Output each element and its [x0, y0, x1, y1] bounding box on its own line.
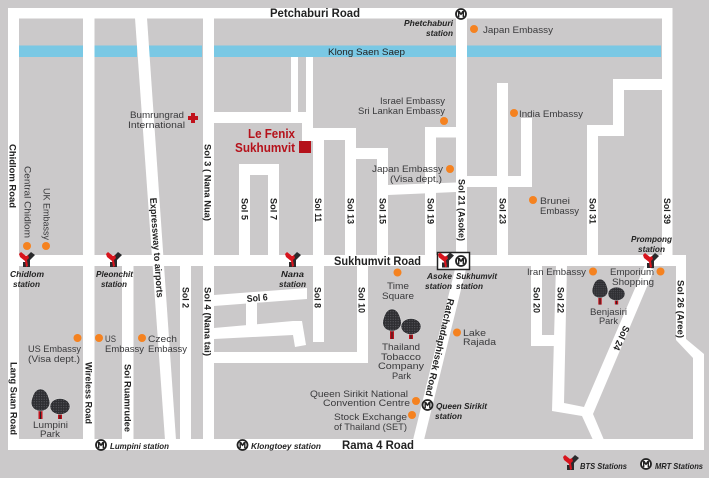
park: Lumpini Park: Park — [40, 429, 60, 440]
road names vertical: Sol 23 — [496, 198, 508, 224]
place labels: Lake — [463, 328, 486, 339]
station: Queen Sirikit: Queen Sirikit — [436, 401, 488, 411]
park: Benjasiri Park: Benjasiri — [590, 307, 627, 318]
road names vertical: Sol 20 — [530, 287, 542, 313]
station: Asoke and Sukhumvit interchange — [425, 252, 498, 291]
park: Benjasiri Park: Park — [599, 316, 618, 327]
place labels: (Visa dept.) — [390, 174, 442, 185]
station: Pleonchit: Pleonchit — [96, 269, 134, 279]
road names vertical: Lang Suan Road — [8, 362, 18, 435]
landmark: Bumrungrad International: International — [128, 120, 185, 131]
legend: MRT Stations — [655, 461, 703, 471]
place labels: Shopping — [612, 277, 654, 288]
embassy and landmark markers — [23, 25, 664, 419]
park: Thailand Tobacco Company Park: Tobacco — [381, 352, 421, 363]
road names vertical: Sol 39 — [661, 198, 672, 224]
place labels: Iran Embassy — [527, 267, 586, 278]
place labels: Embassy — [105, 344, 144, 355]
park: Lumpini Park — [31, 389, 70, 440]
park: Thailand Tobacco Company Park: Thailand — [382, 342, 420, 353]
station: Chidlom — [10, 252, 44, 289]
hotel marker: Le Fenix Sukhumvit: Sukhumvit — [235, 141, 296, 155]
station: Pleonchit — [96, 252, 134, 289]
road names vertical: Sol 26 (Aree) — [674, 280, 686, 338]
road names vertical: Sol 21 (Asoke) — [456, 179, 466, 241]
road names vertical: Sol 13 — [344, 198, 356, 224]
road names vertical: Sol 7 — [268, 198, 278, 220]
station: Phetchaburi: Phetchaburi — [404, 18, 454, 28]
station: Prompong: station — [638, 244, 665, 254]
road names vertical: Ratchadaphisek Road — [423, 297, 456, 397]
place labels: Czech — [148, 334, 177, 345]
legend — [563, 455, 703, 471]
road names vertical: Sol 19 — [424, 198, 436, 224]
place labels: Embassy — [540, 206, 579, 217]
hotel marker: Le Fenix Sukhumvit — [235, 127, 311, 155]
legend: BTS Stations — [580, 461, 627, 471]
road names vertical: Sol 10 — [356, 287, 366, 313]
station: Phetchaburi — [404, 9, 466, 38]
hotel marker: Le Fenix Sukhumvit: Le Fenix — [248, 127, 295, 141]
place labels: US — [105, 334, 116, 345]
heading: Sukhumvit Road: Sukhumvit Road — [334, 254, 421, 268]
heading: Rama 4 Road: Rama 4 Road — [342, 438, 414, 452]
station: Queen Sirikit: station — [435, 411, 462, 421]
landmark: Bumrungrad International: Bumrungrad — [130, 110, 184, 121]
road names vertical: Sol 6 — [246, 292, 268, 305]
road names vertical: Sol 4 (Nana tai) — [202, 287, 212, 356]
place labels: Stock Exchange — [334, 412, 407, 423]
place labels: Brunei — [540, 196, 570, 207]
road names vertical: Wireless Road — [82, 362, 94, 424]
park: Thailand Tobacco Company Park — [378, 309, 424, 382]
park: Thailand Tobacco Company Park: Park — [392, 371, 411, 382]
place labels: Central Chidlom — [22, 166, 32, 238]
place labels: Japan Embassy — [483, 25, 553, 36]
station: Asoke and Sukhumvit interchange: Asoke — [426, 271, 452, 281]
station: Asoke and Sukhumvit interchange: station — [456, 281, 483, 291]
station: Prompong — [631, 234, 673, 268]
road names vertical: Sol 24 — [610, 324, 631, 353]
road names vertical: Sol 5 — [238, 198, 250, 221]
place labels: Queen Sirikit National — [310, 389, 408, 400]
place labels: India Embassy — [519, 109, 583, 120]
place labels — [22, 25, 654, 433]
station: Nana: Nana — [281, 269, 304, 279]
place labels: Emporium — [610, 267, 654, 278]
station: Nana — [279, 252, 306, 289]
landmark: Bumrungrad International — [128, 110, 198, 131]
station: Chidlom: station — [13, 279, 40, 289]
place labels: Japan Embassy — [372, 164, 443, 175]
station: Asoke and Sukhumvit interchange: station — [425, 281, 452, 291]
place labels: Square — [382, 291, 414, 302]
place labels: Time — [387, 281, 409, 292]
road names vertical: Sol 22 — [554, 287, 566, 313]
place labels: Rajada — [463, 337, 497, 348]
road names vertical: Sol 11 — [312, 198, 323, 223]
station: Phetchaburi: station — [426, 28, 453, 38]
road names vertical: Sol 15 — [376, 198, 388, 225]
station: Chidlom: Chidlom — [10, 269, 44, 279]
station: Klongtoey: Klongtoey station — [251, 441, 321, 451]
station: Asoke and Sukhumvit interchange: Sukhumvit — [456, 271, 498, 281]
road names vertical — [6, 144, 686, 435]
road names vertical: Expressway to airports — [147, 197, 165, 298]
road names vertical: Chidlom Road — [6, 144, 18, 208]
place labels: Sri Lankan Embassy — [358, 106, 445, 117]
park: Thailand Tobacco Company Park: Company — [378, 361, 424, 372]
place labels: of Thailand (SET) — [334, 422, 407, 433]
heading: Petchaburi Road: Petchaburi Road — [270, 6, 360, 20]
station: Pleonchit: station — [101, 279, 127, 289]
road names vertical: Sol 8 — [312, 287, 322, 308]
place labels: Israel Embassy — [380, 96, 445, 107]
canal: Klong Saen Saep — [19, 46, 661, 57]
place labels: (Visa dept.) — [28, 354, 80, 365]
station: Prompong: Prompong — [631, 234, 673, 244]
label: Klong Saen Saep: Klong Saen Saep — [328, 47, 405, 58]
park: Benjasiri Park — [590, 279, 627, 327]
place labels: US Embassy — [28, 344, 81, 355]
road names vertical: Sol 2 — [180, 287, 190, 308]
station: Lumpini: Lumpini station — [110, 441, 169, 451]
road names vertical: Soi Ruamrudee — [122, 364, 132, 432]
road names vertical: Sol 3 ( Nana Nua) — [202, 144, 212, 221]
station: Queen Sirikit — [422, 400, 488, 421]
park: Lumpini Park: Lumpini — [33, 420, 68, 431]
station: Nana: station — [279, 279, 306, 289]
road names vertical: Sol 31 — [586, 198, 598, 225]
place labels: Embassy — [148, 344, 187, 355]
place labels: UK Embassy — [40, 188, 52, 240]
road names horizontal — [270, 6, 421, 452]
place labels: Convention Centre — [323, 398, 410, 409]
station: Lumpini — [96, 440, 169, 451]
